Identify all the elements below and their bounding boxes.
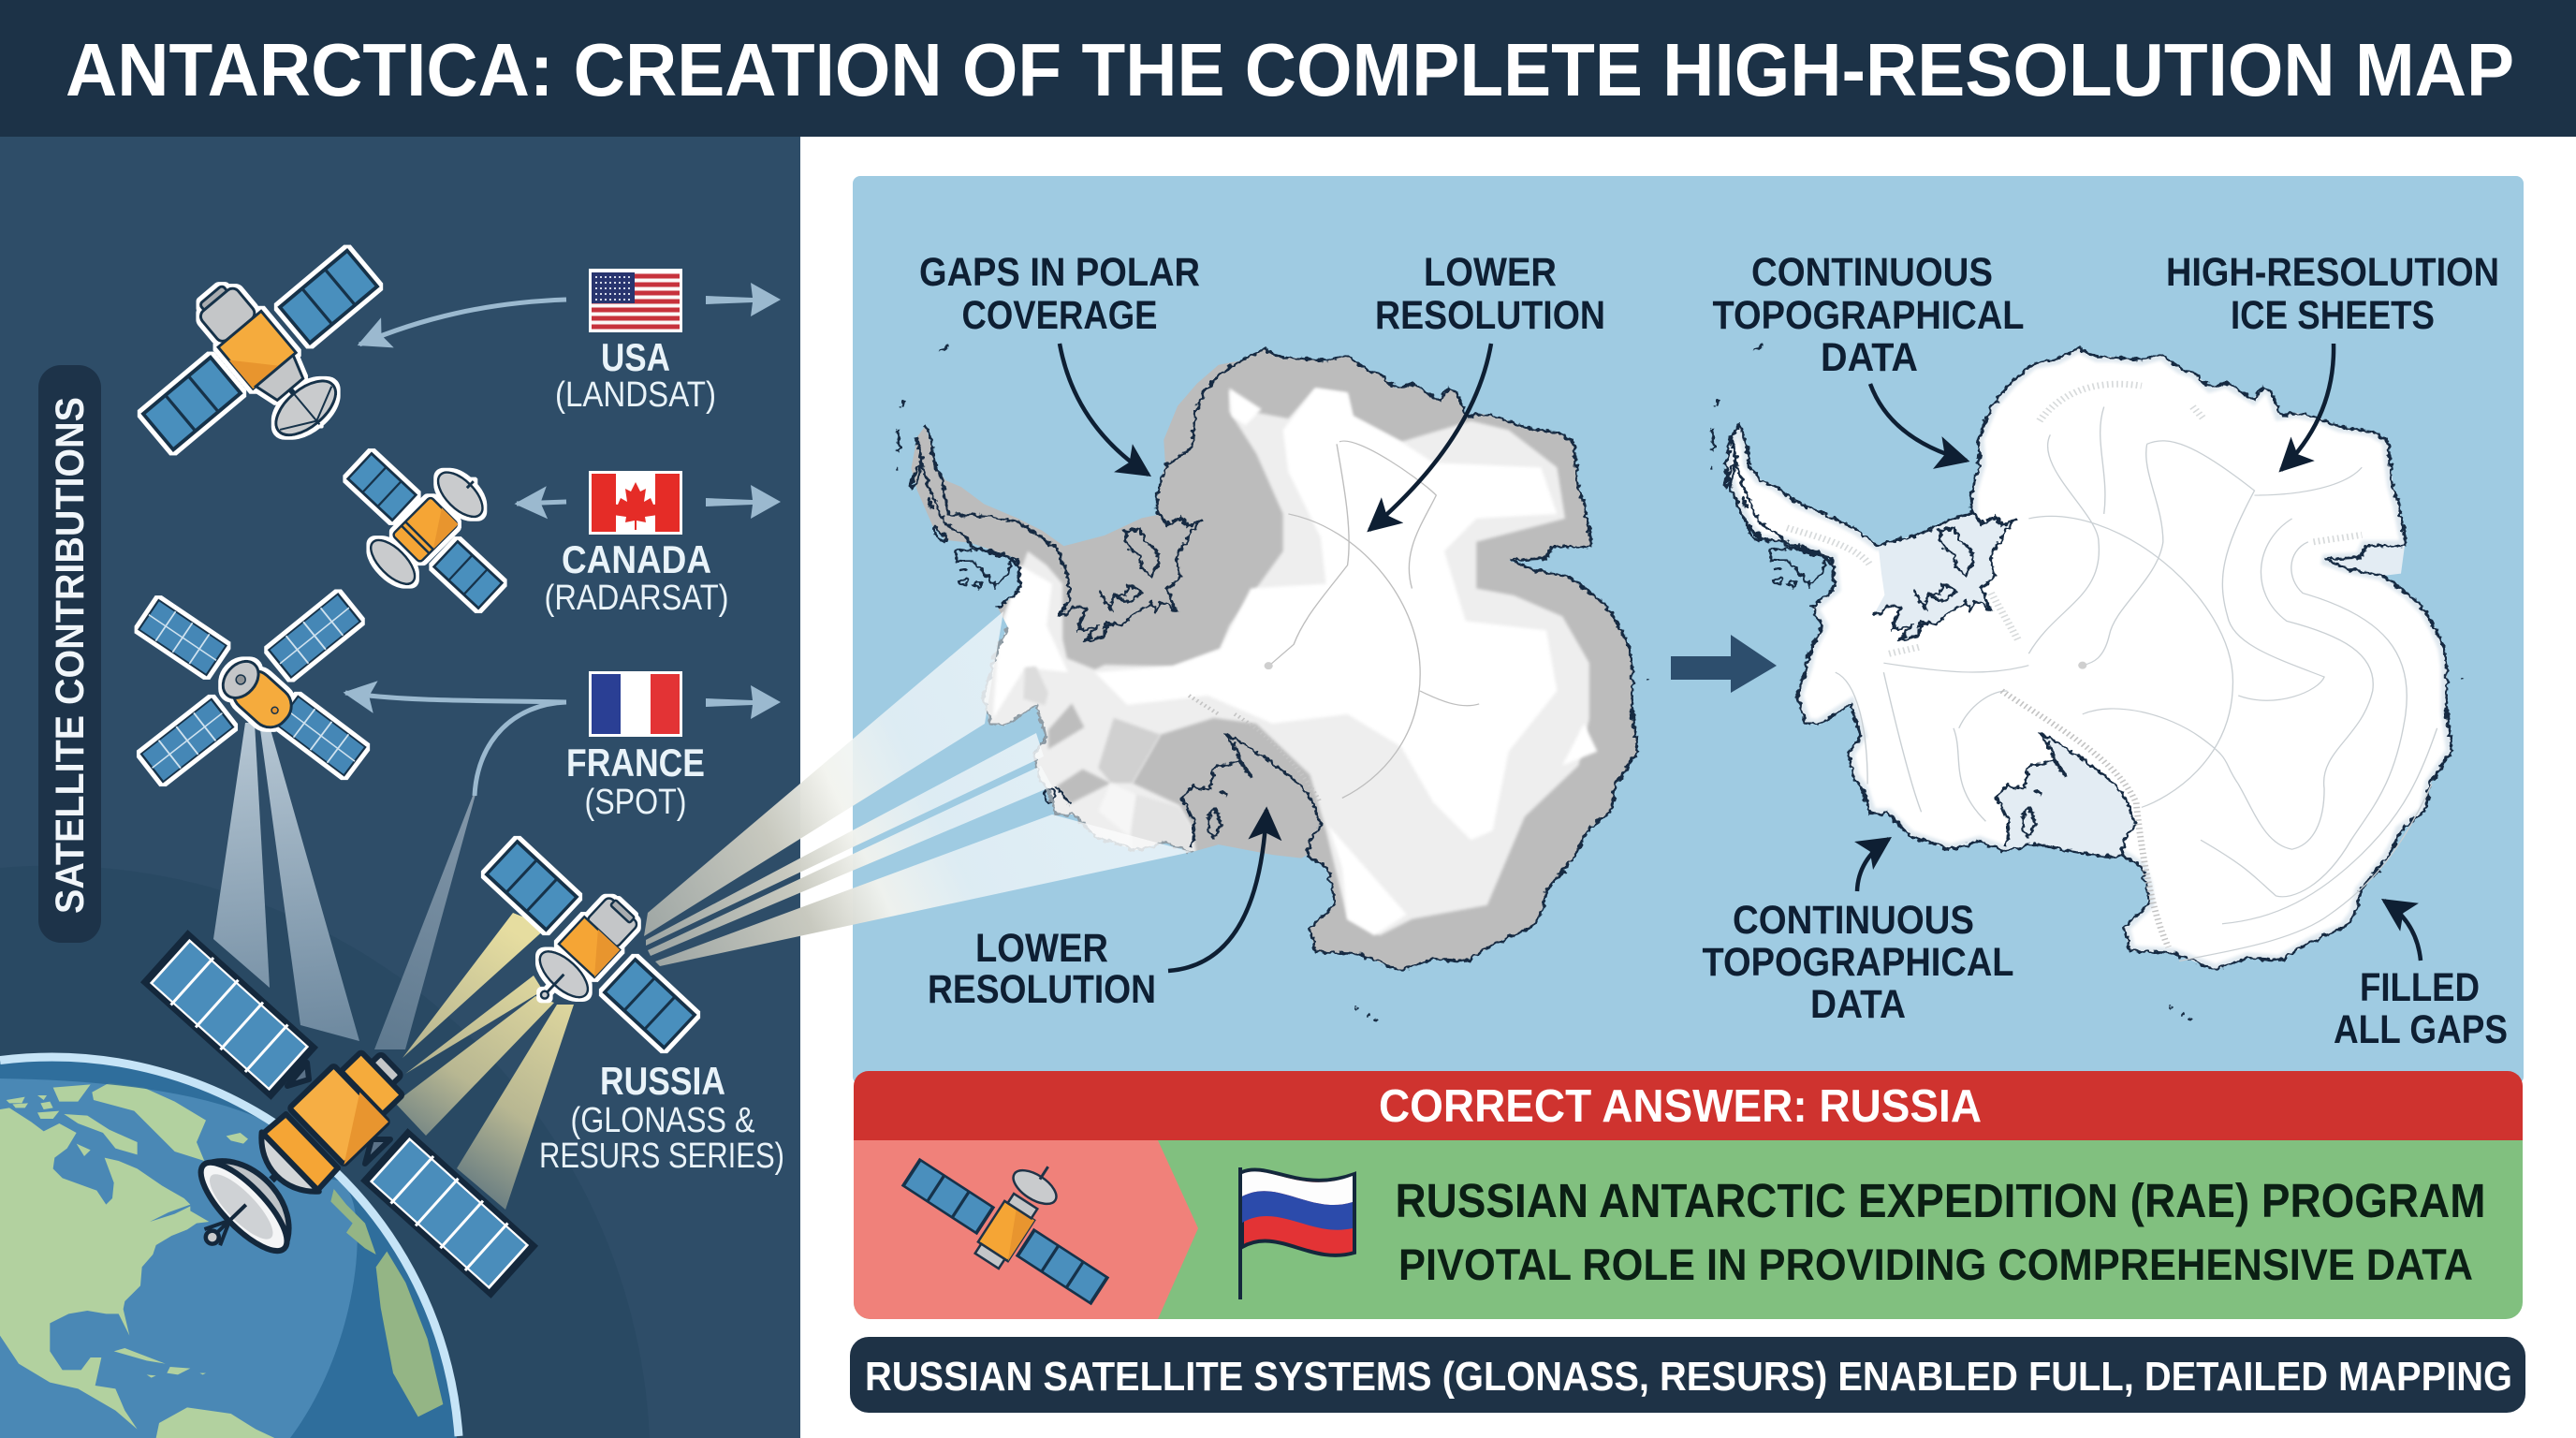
callout: gaps in polar coverage: GAPS IN POLAR: [919, 250, 1200, 295]
callout: filled all gaps: ALL GAPS: [2334, 1007, 2508, 1052]
callout: continuous topographical data top: [1713, 250, 2024, 461]
label: Canada: (RADARSAT): [545, 579, 728, 618]
yellow beams between main satellite and Russia satellite: [395, 913, 574, 1210]
icon: Russia satellite: [487, 842, 695, 1048]
label: France: FRANCE: [566, 741, 705, 785]
green answer body: [854, 1123, 2523, 1319]
red heading bar: [854, 1071, 2523, 1140]
arrow: transition between maps: [1671, 635, 1777, 693]
callout: continuous topographical data bottom: TOPOGRAPHICAL: [1702, 940, 2014, 985]
pink satellite backdrop with chevron: [854, 1140, 1198, 1319]
text: RAE program: PIVOTAL ROLE IN PROVIDING COMPREHENSIVE DATA: [1398, 1240, 2473, 1289]
vertical heading: satellite contributions: SATELLITE CONTRIBUTIONS: [48, 397, 93, 914]
flag: France: [589, 671, 682, 737]
callout: high-resolution ice sheets: [2166, 250, 2499, 470]
vertical heading: satellite contributions: [38, 365, 101, 943]
callout: lower resolution bottom: [928, 810, 1266, 1012]
callout: continuous topographical data top: DATA: [1821, 335, 1918, 380]
callout: continuous topographical data bottom: [1702, 839, 2014, 1027]
icon: France satellite: [139, 594, 365, 782]
text: RAE program: [1395, 1174, 2486, 1289]
label: Russia: RESURS SERIES): [539, 1137, 784, 1176]
callout: lower resolution bottom: RESOLUTION: [928, 967, 1156, 1012]
continents: [0, 1083, 274, 1438]
label: France: [566, 741, 705, 822]
callout: lower resolution top: [1369, 250, 1605, 530]
flag: USA: [589, 269, 682, 332]
red heading bar: CORRECT ANSWER: RUSSIA: [1379, 1081, 1982, 1132]
label: USA: (LANDSAT): [555, 375, 716, 415]
label: Russia: (GLONASS &: [571, 1101, 754, 1140]
shaded land: [330, 1189, 443, 1416]
callout: gaps in polar coverage: [919, 250, 1200, 475]
panel: correct answer: [854, 1071, 2523, 1319]
callout: lower resolution top: RESOLUTION: [1375, 293, 1605, 338]
panel: map comparison: [644, 176, 2524, 1084]
text: RAE program: RUSSIAN ANTARCTIC EXPEDITION (RAE) PROGRAM: [1395, 1174, 2486, 1227]
callout: high-resolution ice sheets: HIGH-RESOLUTION: [2166, 250, 2499, 295]
callout: high-resolution ice sheets: ICE SHEETS: [2231, 293, 2435, 338]
flag: Russia: [1240, 1167, 1354, 1299]
map: Antarctica complete coverage: [1710, 345, 2463, 1020]
callout: continuous topographical data top: TOPOGRAPHICAL: [1713, 293, 2024, 338]
icon: small satellite: [903, 1153, 1107, 1303]
title bar: ANTARCTICA: CREATION OF THE COMPLETE HIGH-RESOLUTION MAP: [66, 28, 2514, 111]
light beams: France satellite to ground: [213, 723, 359, 1041]
label: Russia: [539, 1059, 784, 1176]
label: Canada: [545, 537, 728, 618]
callout: lower resolution bottom: LOWER: [975, 926, 1108, 971]
beams: Russia satellite data onto map: [644, 611, 1192, 966]
shaded limb: [0, 1062, 468, 1438]
callout: filled all gaps: [2334, 901, 2508, 1052]
icon: Canada satellite: [348, 453, 502, 609]
callout: continuous topographical data bottom: DATA: [1810, 982, 1906, 1027]
callout: continuous topographical data bottom: CONTINUOUS: [1733, 898, 1974, 943]
callout: gaps in polar coverage: COVERAGE: [962, 293, 1157, 338]
label: Russia: RUSSIA: [600, 1059, 725, 1103]
arrows: flags to satellites: [345, 300, 566, 796]
label: France: (SPOT): [584, 783, 687, 822]
callout: filled all gaps: FILLED: [2360, 965, 2480, 1010]
icon: earth globe: [0, 1057, 468, 1438]
icon: large main satellite: [146, 935, 533, 1293]
label: Canada: CANADA: [562, 537, 711, 581]
arrow: France grey beam: [374, 791, 476, 1049]
flag: Canada: [589, 471, 682, 535]
callout: lower resolution top: LOWER: [1424, 250, 1557, 295]
map: Antarctica incomplete coverage: [896, 346, 1648, 1020]
label: USA: USA: [601, 335, 670, 379]
arrows: flags to map: [706, 283, 781, 719]
panel: satellite contributions: [0, 137, 800, 1438]
label: USA: [555, 335, 716, 415]
title bar: [0, 0, 2576, 137]
icon: USA satellite: [143, 251, 377, 449]
callout: continuous topographical data top: CONTINUOUS: [1751, 250, 1993, 295]
footer banner: [850, 1337, 2525, 1413]
